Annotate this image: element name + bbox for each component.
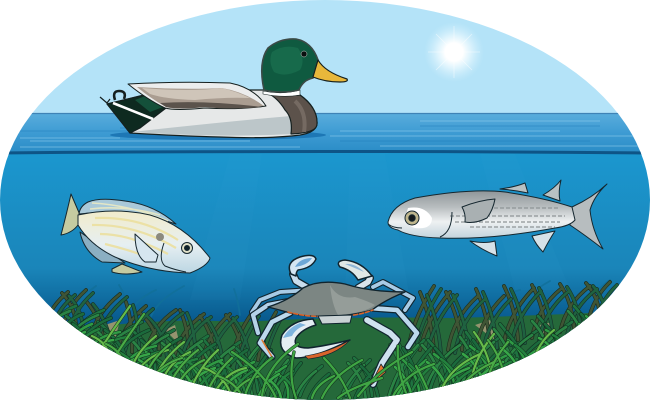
crab left legs (252, 290, 310, 357)
pinfish pectoral fin (135, 234, 158, 262)
waterline (0, 152, 650, 153)
fish: mullet (388, 180, 607, 256)
seagrass olive layer (48, 282, 617, 368)
duck eye (301, 51, 307, 57)
crab carapace (268, 282, 405, 316)
duck shadow (110, 132, 326, 140)
seagrass dark layer (58, 304, 588, 400)
mullet mouth (388, 224, 402, 228)
pinfish tail (61, 194, 80, 235)
icon: sun (428, 26, 480, 78)
pinfish dorsal fin (79, 199, 176, 224)
seabed (78, 312, 594, 400)
crab (252, 255, 417, 386)
duck (100, 39, 347, 140)
underwater (0, 152, 650, 400)
seagrass front blades (232, 344, 434, 398)
seabed sand patches (108, 320, 550, 340)
duck chest (266, 92, 317, 134)
mullet tail (570, 184, 607, 249)
duck wing (128, 82, 266, 110)
duck bill (313, 60, 347, 82)
mullet eye (405, 211, 419, 225)
mullet body (388, 191, 575, 238)
crab lower claw arm (281, 319, 350, 359)
duck rear (107, 94, 166, 133)
pinfish lower fins (80, 232, 125, 263)
pinfish eye (182, 242, 192, 254)
mullet fins (470, 180, 561, 256)
crab left claw (289, 255, 316, 288)
mullet gill (440, 212, 452, 237)
pinfish gill (161, 243, 186, 272)
crab mouth (318, 315, 352, 324)
sky (0, 0, 650, 114)
distant seagrass silhouettes (70, 280, 610, 320)
crab right claw (338, 260, 372, 288)
crab right legs (367, 282, 417, 386)
mullet head highlight (406, 207, 432, 228)
fish: pinfish (61, 194, 210, 274)
pinfish spot (156, 233, 164, 241)
duck collar (263, 90, 300, 96)
duck tail curl (114, 91, 125, 100)
water surface (0, 113, 650, 153)
duck body (108, 90, 317, 138)
seagrass mid layer (61, 316, 617, 400)
duck head (262, 39, 318, 92)
pinfish body (78, 211, 210, 273)
seagrass bright layer (90, 304, 556, 394)
mullet pectoral fin (462, 199, 495, 222)
